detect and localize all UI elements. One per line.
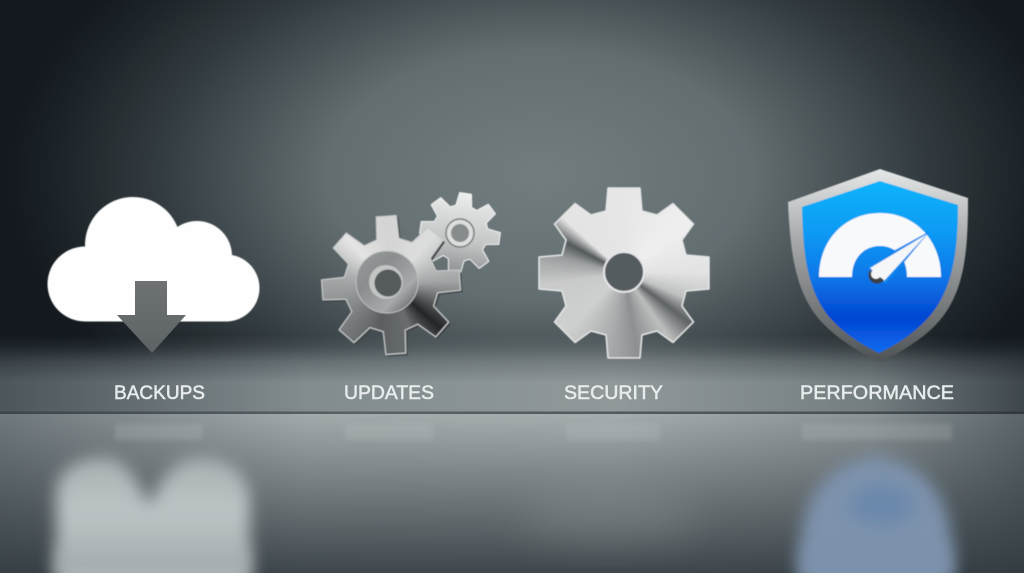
shield blue face — [802, 181, 958, 353]
reflective floor — [0, 412, 1024, 573]
gear outline — [539, 188, 709, 358]
download arrow — [117, 281, 186, 353]
floor reflection: shield — [799, 456, 953, 573]
floor reflection: gears — [545, 501, 677, 544]
large gear hub — [356, 251, 418, 313]
label: performance: PERFORMANCE — [800, 383, 954, 404]
gauge needle — [866, 231, 930, 284]
large gear extrusion — [319, 213, 467, 361]
shelf band behind labels — [0, 335, 1024, 413]
shield rim — [788, 169, 968, 362]
gear face — [536, 185, 712, 361]
gap between gears — [423, 235, 437, 251]
label: backups: BACKUPS — [114, 383, 205, 404]
icon: performance shield — [788, 169, 968, 362]
floor reflection: label text smudges — [115, 424, 952, 440]
large gear face — [320, 214, 462, 356]
icon: cloud with download arrow — [48, 197, 260, 353]
small gear — [415, 188, 505, 278]
icon: updates gears — [320, 191, 502, 357]
gauge dial — [819, 213, 941, 277]
label: security: SECURITY — [564, 383, 663, 404]
floor reflection: cloud — [56, 457, 250, 573]
label: updates: UPDATES — [344, 383, 434, 404]
cloud body — [48, 197, 260, 322]
icon: security gear — [536, 185, 712, 361]
gear centre hole — [604, 252, 644, 292]
